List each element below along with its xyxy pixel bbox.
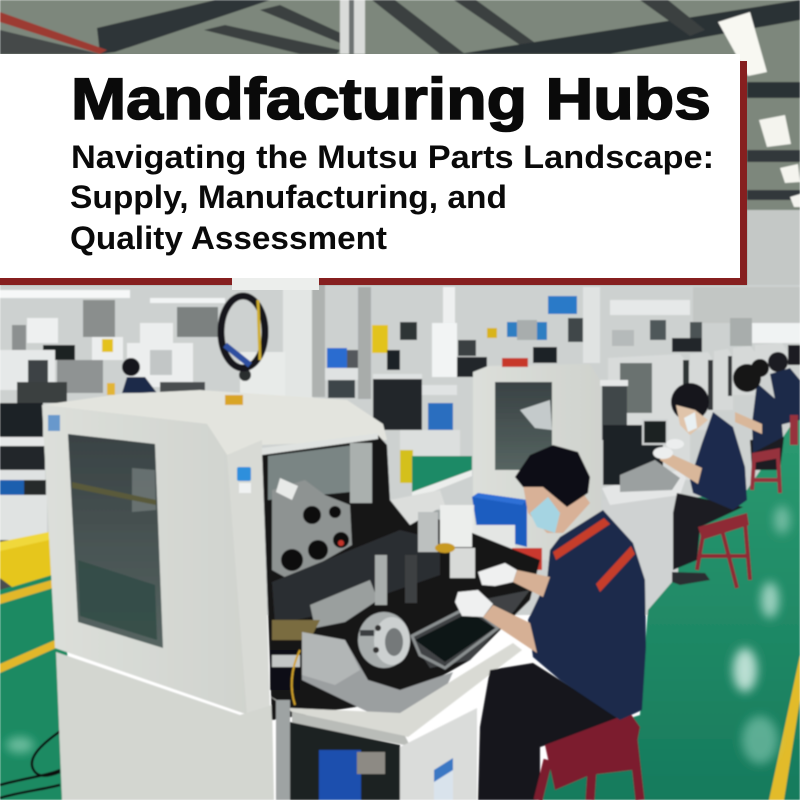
front worker (455, 445, 646, 800)
ceiling (0, 0, 800, 290)
subtitle: Supply, Manufacturing, and (70, 179, 507, 215)
white panel (0, 54, 740, 278)
title panel (0, 54, 747, 285)
blue bin and small parts (415, 493, 542, 570)
ceiling lights (718, 12, 800, 207)
title: Mandfacturing Hubs (71, 67, 711, 132)
table cabinet (276, 700, 477, 800)
silver wheel part (302, 612, 453, 725)
background workshop (0, 278, 800, 615)
floor (0, 412, 800, 800)
work table and tray (268, 590, 530, 746)
far wall (747, 210, 800, 325)
machine interior (262, 433, 540, 720)
front machine cabinet (42, 390, 387, 800)
subtitle: Navigating the Mutsu Parts Landscape: (71, 139, 714, 175)
far machine row (608, 343, 788, 480)
panel shadow (0, 61, 747, 285)
white block under panel (232, 278, 319, 290)
subtitle (70, 139, 714, 256)
far workers (653, 345, 800, 588)
second machine (473, 358, 686, 607)
subtitle: Quality Assessment (70, 220, 387, 256)
